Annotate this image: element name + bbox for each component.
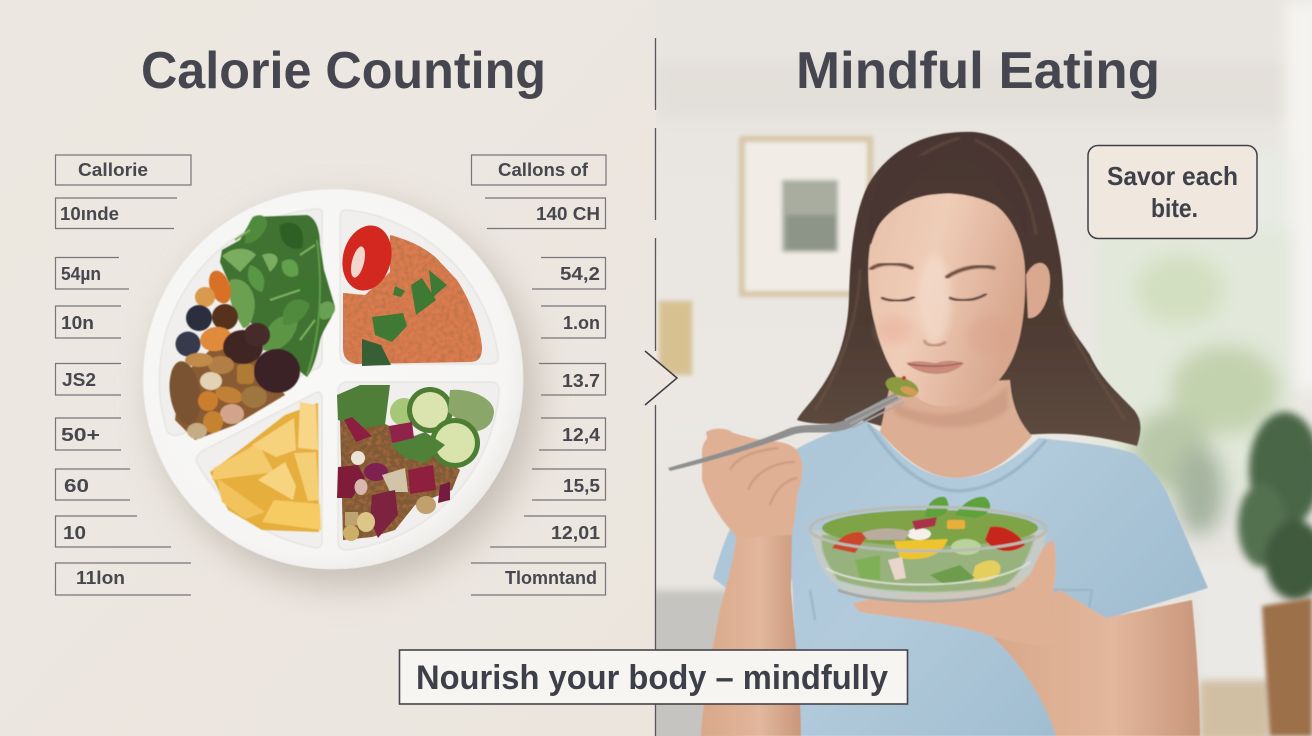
food: beets and cucumber salad: [337, 385, 494, 541]
tagline banner: [400, 650, 908, 704]
left calorie label column: [56, 155, 191, 595]
food: red grain and tomato: [336, 220, 482, 366]
callout: savor each bite: [1088, 146, 1257, 238]
panel: calorie counting background: [0, 0, 656, 736]
fork: [668, 393, 904, 471]
plate shadow: [153, 203, 537, 587]
eyebrows: [871, 264, 912, 269]
right label 2: 140 CH: [536, 204, 600, 224]
food: mango chunks: [210, 402, 321, 532]
right arm: [985, 590, 1200, 736]
left label 7: [56, 469, 130, 500]
right label 2: [485, 198, 606, 228]
right label 3: [532, 258, 606, 289]
right label 5: [539, 364, 606, 395]
food: greens: [220, 215, 335, 377]
ear: [1026, 263, 1050, 318]
left label 7: 60: [64, 476, 89, 496]
hair back: [797, 132, 1140, 446]
blurred floor and furniture: [656, 588, 1272, 736]
right label 9: Tlomntand: [505, 568, 597, 588]
callout: savor each bite: bite.: [1151, 193, 1198, 223]
blurred pot plant: [1238, 412, 1312, 736]
left label 5: [56, 364, 121, 395]
blurred window foliage: [1095, 230, 1290, 535]
left label 6: 50+: [61, 425, 100, 445]
neck: [880, 380, 1032, 478]
face: [868, 194, 1025, 407]
right label 7: 15,5: [563, 476, 600, 496]
title: calorie counting: Calorie Counting: [141, 42, 546, 100]
right label 1: Callons of: [498, 160, 589, 180]
right label 1: [472, 155, 606, 185]
right label 8: 12,01: [551, 523, 600, 543]
right label 4: [541, 306, 606, 338]
right calorie label column: [471, 155, 606, 595]
woman: [668, 132, 1208, 736]
collar and pocket detail: [809, 422, 1092, 620]
tagline banner: Nourish your body – mindfully: [416, 659, 888, 697]
right thumb over bowl: [1034, 540, 1056, 567]
center divider with arrow: [645, 38, 677, 736]
left label 4: 10n: [61, 313, 94, 333]
right label 4: 1.on: [563, 313, 600, 333]
shirt: [713, 421, 1208, 736]
left hand: [702, 432, 802, 538]
left label 2: 10ınde: [60, 204, 119, 224]
divided plate with food: [143, 189, 523, 569]
right label 6: 12,4: [562, 425, 600, 445]
glass salad bowl: [810, 497, 1047, 601]
left label 8: [56, 516, 171, 547]
left label 1: [56, 155, 191, 185]
left label 9: [56, 563, 191, 595]
salad in bowl: [822, 497, 1038, 592]
food: nuts and berries: [166, 268, 300, 440]
left arm: [701, 525, 801, 736]
left label 3: [56, 258, 129, 289]
right label 5: 13.7: [562, 371, 600, 391]
right label 9: [471, 563, 606, 595]
panel: mindful eating photo scene: [650, 0, 1312, 736]
left label 2: [56, 198, 177, 228]
hair over forehead: [870, 156, 923, 245]
mouth: [906, 361, 964, 374]
right label 3: 54,2: [560, 264, 600, 284]
compartment wells: [159, 209, 499, 550]
title: mindful eating: Mindful Eating: [796, 42, 1160, 100]
picture frame: [742, 139, 870, 294]
right label 8: [490, 516, 606, 547]
left label 9: 11lon: [76, 568, 125, 588]
left label 1: Callorie: [78, 160, 148, 180]
small frame: [660, 302, 691, 374]
left label 3: 54µn: [61, 264, 101, 284]
right hand under bowl: [853, 540, 1060, 645]
closed eyes: [882, 297, 914, 301]
left label 5: JS2: [62, 370, 96, 390]
right label 6: [539, 418, 606, 450]
bite of food on fork: [884, 376, 919, 398]
left label 8: 10: [63, 523, 86, 543]
right label 7: [532, 469, 606, 500]
left label 6: [56, 418, 121, 450]
cheek and nose shading: [919, 255, 951, 345]
callout: savor each bite: Savor each: [1107, 161, 1238, 191]
left label 4: [56, 306, 121, 338]
